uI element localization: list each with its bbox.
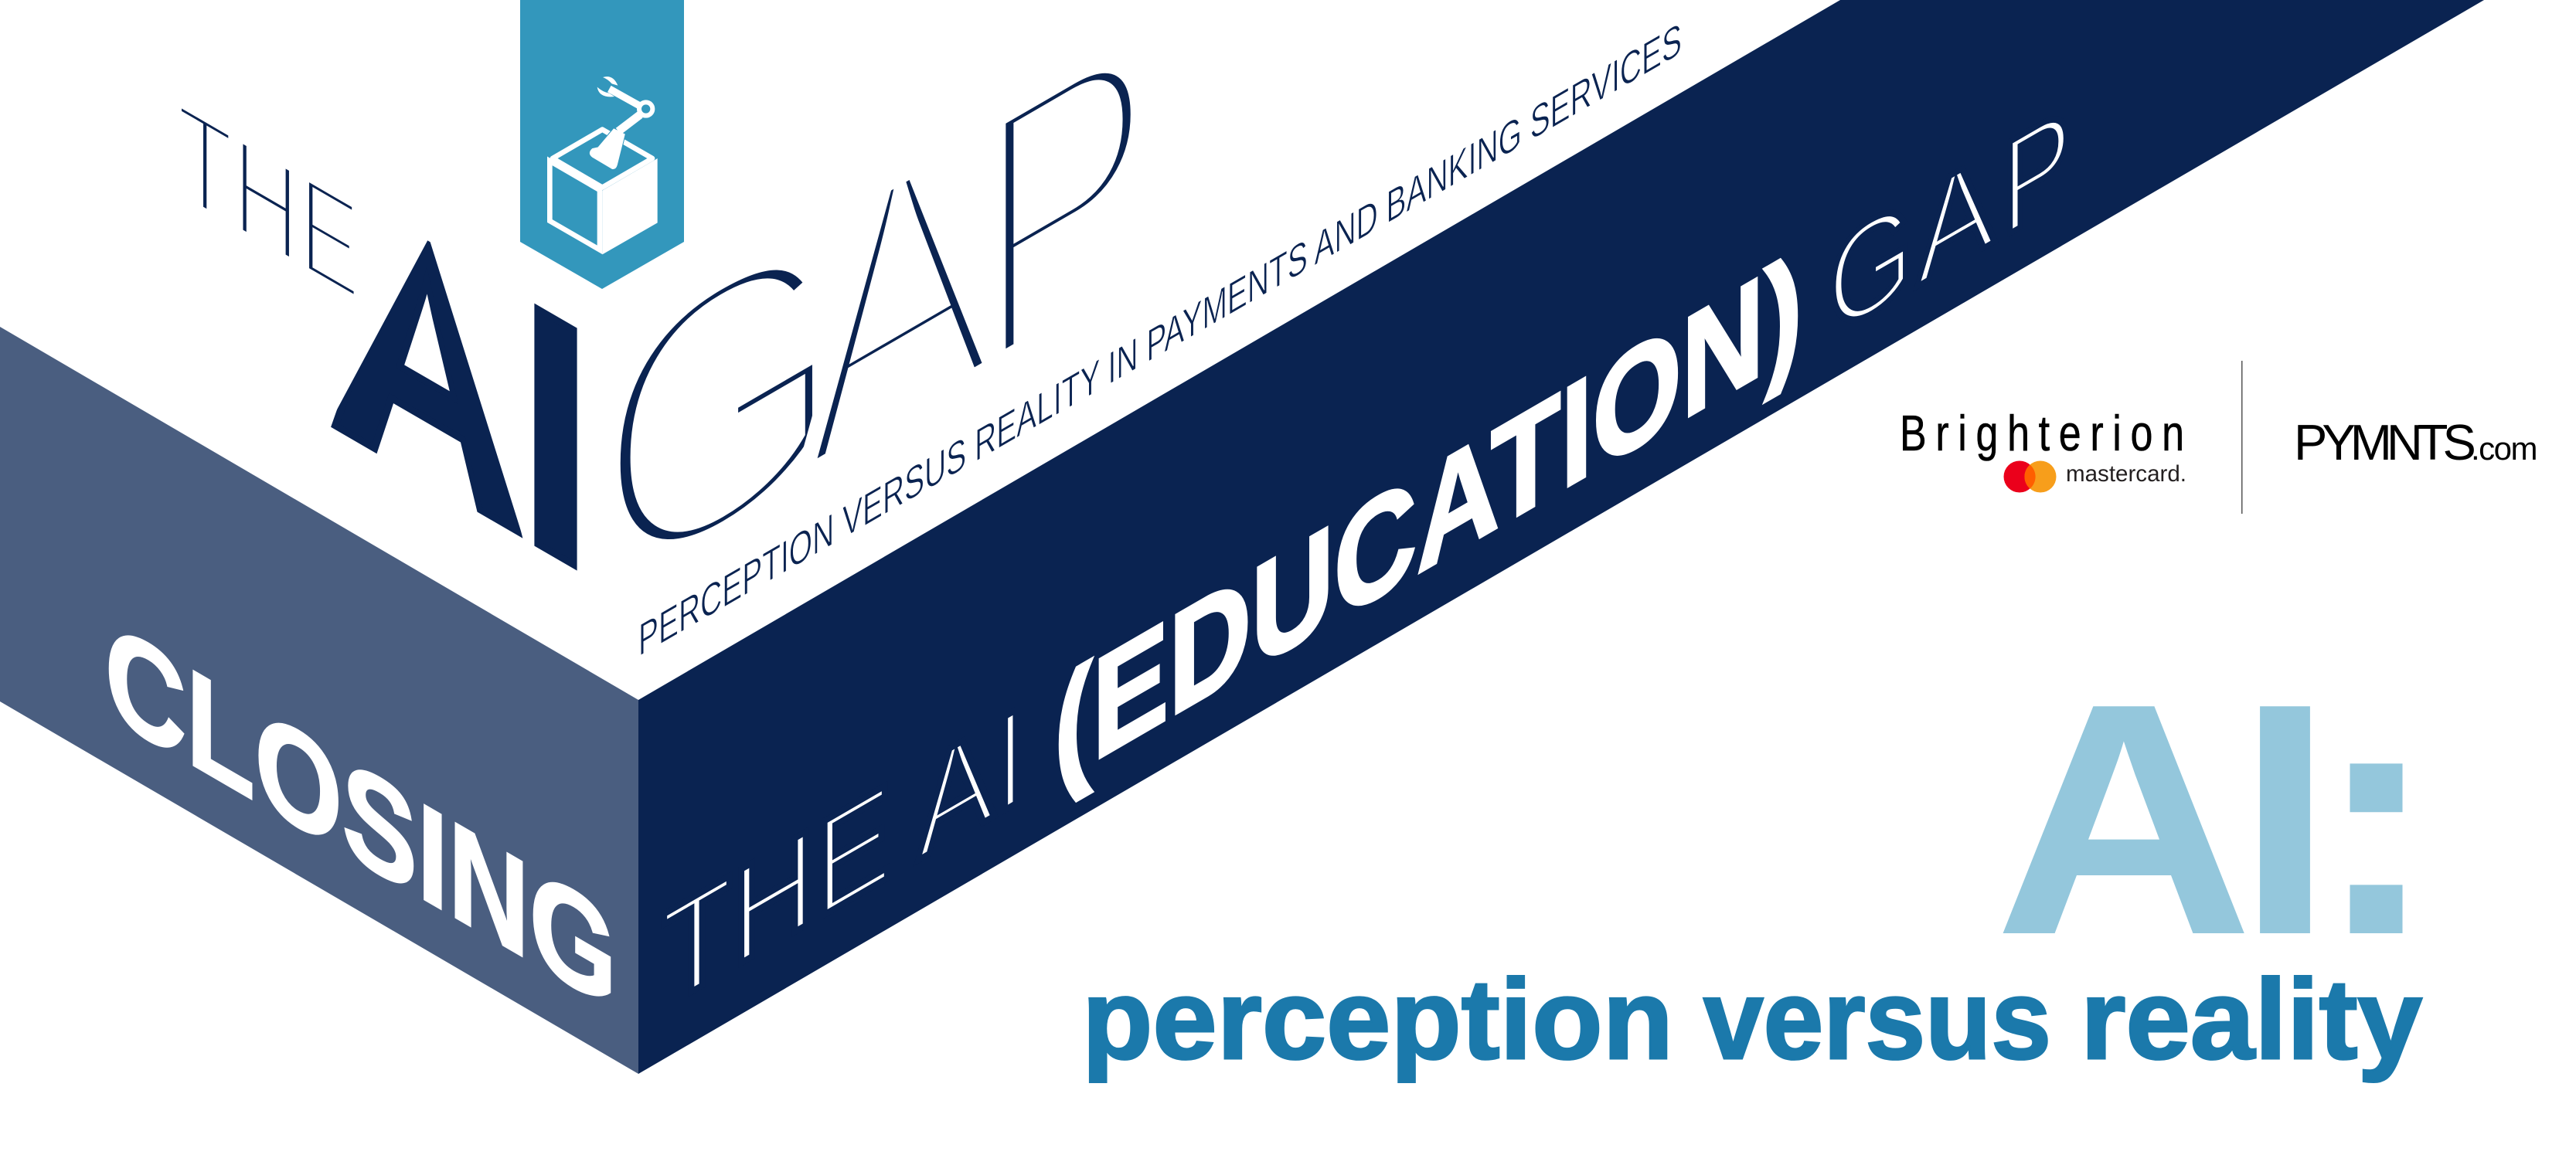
heading: GAP on face: P [2002,78,2071,267]
icon: mastercard circles [2003,460,2056,493]
title: AI: : [2318,633,2435,1002]
heading: GAP on face [1828,78,2071,366]
heading: THE AI: THE AI [662,675,1026,1038]
logo: Brighterion Mastercard [1900,406,2186,493]
subtitle: perception versus reality [1082,956,2422,1083]
heading: GAP: G [594,131,847,681]
ribbon with robot icon [520,0,684,289]
title: AI: I [2237,635,2333,1004]
heading: GAP: A [803,39,998,555]
heading: (EDUCATION): (EDUCATION) [1054,222,1802,815]
heading: THE: THE [177,73,360,331]
subtitle: perception versus reality: versus [1703,956,2051,1083]
title: AI [1994,633,2435,1004]
subtitle: perception versus reality: reality [2081,956,2422,1083]
logo: Brighterion Mastercard: Brighterion [1900,406,2184,461]
logo: Brighterion Mastercard: mastercard. [2066,461,2186,487]
heading: CLOSING: CLOSING [105,590,617,1041]
heading: AI: I [520,226,591,648]
heading: GAP on face: G [1828,168,1914,366]
logo: PYMNTS.com: PYMNTS [2294,414,2475,470]
heading: GAP on face: A [1917,122,1995,315]
title: AI: A [1994,635,2254,1004]
logo: PYMNTS.com: .com [2471,430,2537,467]
icon: robot arm in box [550,76,658,254]
panel: left cube face [0,327,638,1074]
heading: GAP [594,0,1153,681]
heading: AI: A [328,114,526,609]
subtitle: perception versus reality: perception [1082,956,1673,1083]
panel: right cube face [638,0,2484,1074]
